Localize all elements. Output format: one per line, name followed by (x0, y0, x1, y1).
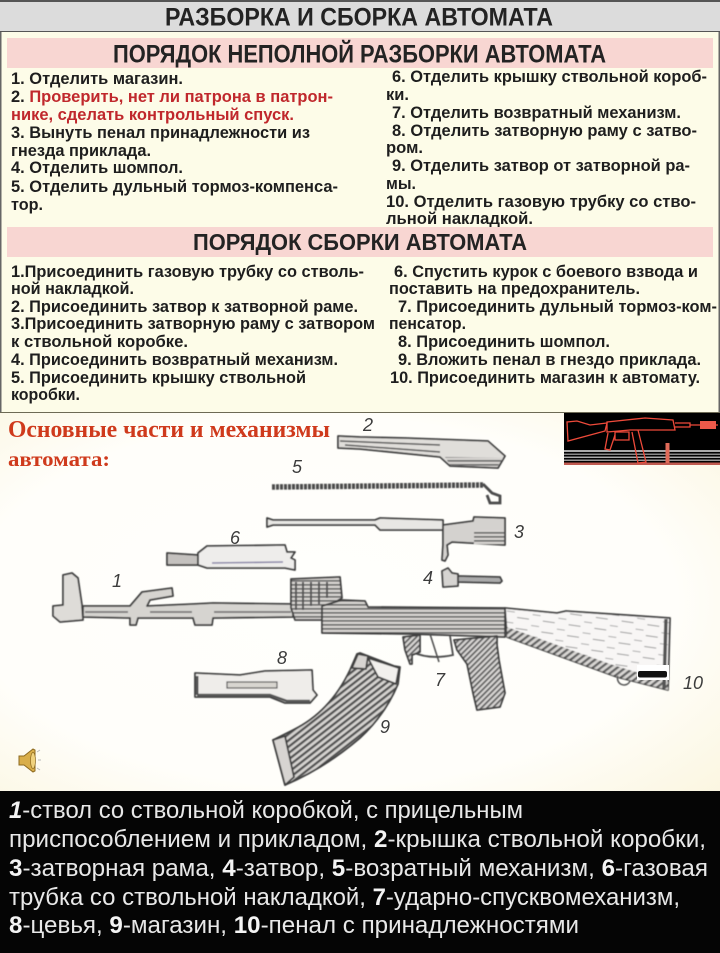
text block: assembly steps 1-5: коробки. (11, 386, 80, 404)
part numbers: 2 (362, 415, 373, 435)
icon: red rifle outline thumbnail (564, 413, 720, 465)
part 4: bolt (442, 568, 502, 587)
text block: disassembly steps 1-5: 5. Отделить дульный тормоз-компенса- (11, 178, 338, 196)
text block: disassembly steps 6-10: 9. Отделить затвор от затворной ра- (392, 157, 690, 175)
part 9: curved magazine (273, 653, 400, 785)
text block: disassembly steps 6-10 (386, 68, 707, 228)
text block: assembly steps 6-10: 9. Вложить пенал в гнездо приклада. (398, 351, 701, 369)
text block: assembly steps 6-10: 6. Спустить курок с боевого взвода и (394, 263, 698, 281)
text block: disassembly steps 6-10: 8. Отделить затворную раму с затво- (392, 122, 697, 140)
heading: assembly order: ПОРЯДОК СБОРКИ АВТОМАТА (193, 229, 527, 255)
text block: disassembly steps 1-5: 4. Отделить шомпол. (11, 159, 183, 177)
panel: parts legend (0, 791, 720, 953)
header band (0, 0, 720, 32)
text block: disassembly steps 6-10: льной накладкой. (386, 210, 533, 228)
text block: disassembly steps 1-5: нике, сделать контрольный спуск. (11, 106, 294, 124)
text block: disassembly steps 1-5: 3. Вынуть пенал принадлежности из (11, 124, 310, 142)
part 8: handguard (195, 670, 317, 703)
part numbers: 8 (277, 648, 287, 668)
text block: assembly steps 6-10: 7. Присоединить дульный тормоз-ком- (398, 298, 717, 316)
heading: main parts and mechanisms: Основные части и механизмы (8, 417, 330, 443)
text block: disassembly steps 1-5: гнезда приклада. (11, 142, 151, 160)
heading: main parts and mechanisms: автомата: (8, 447, 110, 471)
text block: assembly steps 1-5: к ствольной коробке. (11, 333, 188, 351)
part numbers: 10 (683, 673, 703, 693)
icon: black bar on white patch (stock compartment) (637, 665, 669, 680)
heading: assembly order (7, 227, 713, 257)
text block: assembly steps 6-10: пенсатор. (389, 315, 466, 333)
text block: assembly steps 1-5: ной накладкой. (11, 280, 134, 298)
text block: assembly steps 6-10: поставить на предохранитель. (389, 280, 640, 298)
pistol grip (454, 636, 505, 710)
part 2: receiver cover (338, 436, 505, 468)
text block: assembly steps 6-10: 10. Присоединить магазин к автомату. (390, 369, 700, 387)
panel: parts legend: трубка со ствольной накладкой, 7-ударно-спусквомеханизм, (9, 884, 680, 911)
heading: disassembly order: ПОРЯДОК НЕПОЛНОЙ РАЗБОРКИ АВТОМАТА (113, 38, 606, 68)
text block: assembly steps 1-5: 2. Присоединить затвор к затворной раме. (11, 298, 358, 316)
panel: parts legend: 3-затворная рама, 4-затвор, 5-возратный механизм, 6-газовая (9, 855, 708, 882)
text block: assembly steps 6-10: 8. Присоединить шомпол. (398, 333, 610, 351)
panel: assembly and disassembly instructions (0, 32, 720, 414)
text block: disassembly steps 6-10: 6. Отделить крышку ствольной короб- (392, 68, 707, 86)
text block: assembly steps 6-10 (389, 263, 717, 387)
part 3: bolt carrier (267, 517, 505, 561)
text block: assembly steps 1-5: 4. Присоединить возвратный механизм. (11, 351, 338, 369)
panel: parts legend: приспособлением и прикладом, 2-крышка ствольной коробки, (9, 826, 706, 853)
text block: disassembly steps 6-10: 7. Отделить возвратный механизм. (392, 104, 681, 122)
part numbers: 4 (423, 568, 433, 588)
text block: disassembly steps 1-5: 1. Отделить магазин. (11, 70, 183, 88)
part numbers: 7 (435, 670, 446, 690)
trigger group (412, 636, 453, 657)
text block: disassembly steps 6-10: ром. (386, 139, 423, 157)
part 1: barrel and receiver with stock (53, 573, 670, 710)
text block: disassembly steps 6-10: мы. (386, 175, 416, 193)
panel: rifle diagram background (0, 413, 720, 791)
text block: assembly steps 1-5: 5. Присоединить крышку ствольной (11, 369, 306, 387)
text block: disassembly steps 1-5: тор. (11, 196, 43, 214)
part numbers: 1 (112, 571, 122, 591)
icon: speaker (19, 749, 41, 772)
part numbers: 6 (230, 528, 241, 548)
heading: main parts and mechanisms (8, 417, 330, 471)
text block: assembly steps 1-5: 3.Присоединить затворную раму с затвором (11, 315, 375, 333)
part 6: gas tube with handguard (167, 545, 295, 570)
part numbers: 3 (514, 522, 524, 542)
panel: parts legend: 1-ствол со ствольной коробкой, с прицельным (9, 797, 523, 824)
text block: disassembly steps 1-5: 2. Проверить, нет ли патрона в патрон- (11, 88, 333, 106)
part numbers: 5 (292, 457, 303, 477)
part 5: return mechanism (272, 484, 500, 503)
stock (505, 608, 670, 690)
part numbers (112, 415, 703, 737)
text block: assembly steps 1-5 (11, 263, 375, 404)
text block: assembly steps 1-5: 1.Присоединить газовую трубку со стволь- (11, 263, 364, 281)
part numbers: 9 (380, 717, 390, 737)
text block: disassembly steps 6-10: ки. (386, 86, 409, 104)
illustration: disassembled rifle parts (53, 436, 670, 785)
panel: parts legend: 8-цевья, 9-магазин, 10-пенал с принадлежностями (9, 912, 579, 939)
text block: disassembly steps 1-5 (11, 70, 338, 214)
title: РАЗБОРКА И СБОРКА АВТОМАТА (165, 4, 553, 32)
text block: disassembly steps 6-10: 10. Отделить газовую трубку со ство- (386, 193, 696, 211)
